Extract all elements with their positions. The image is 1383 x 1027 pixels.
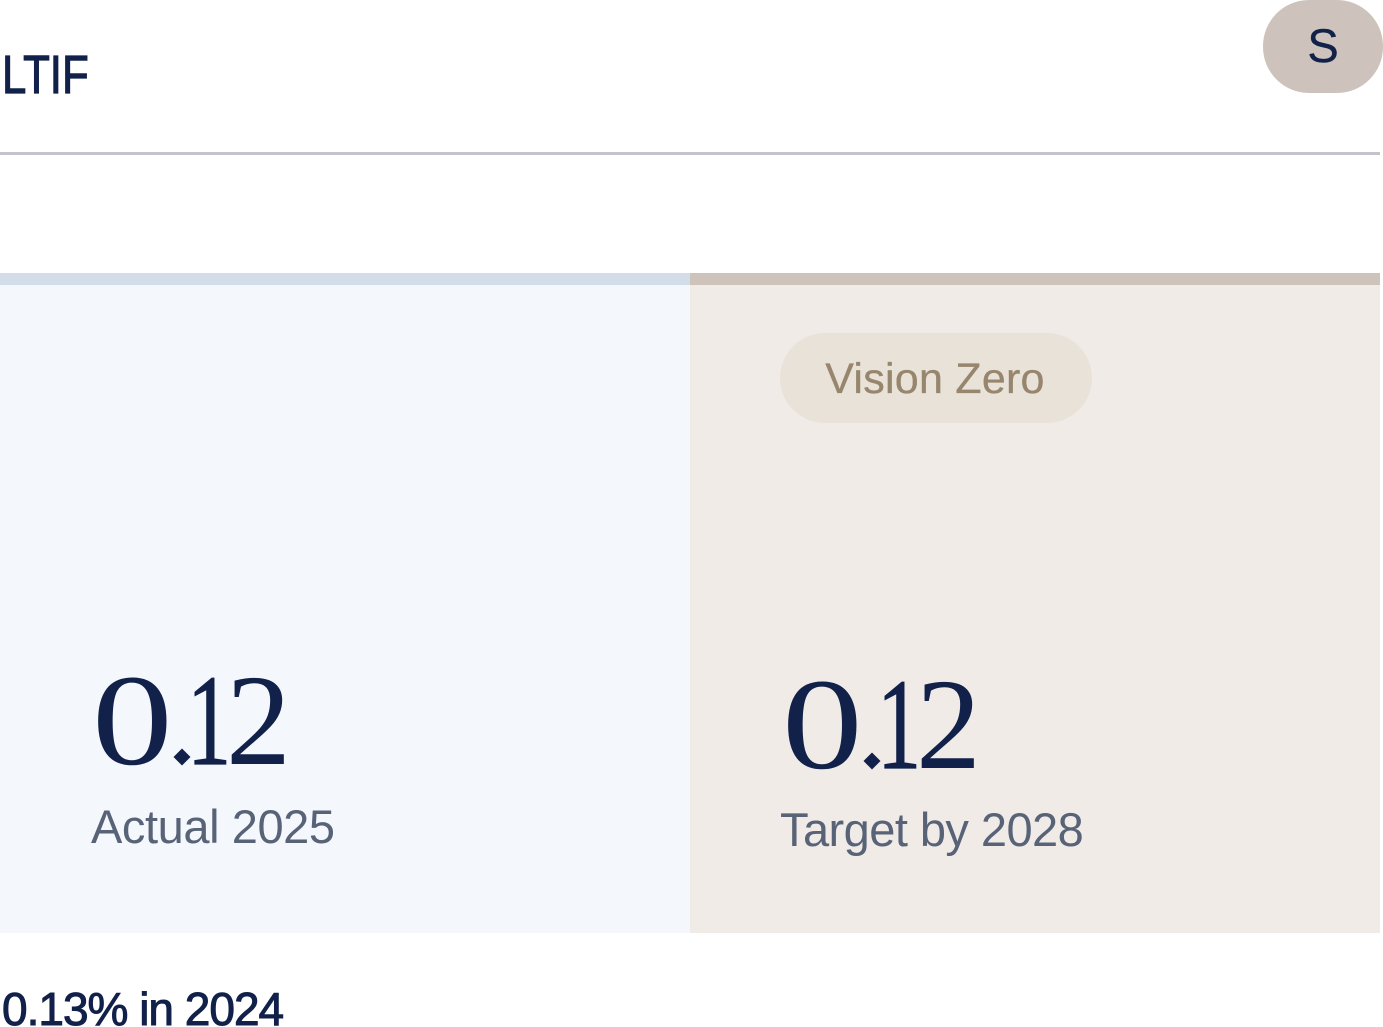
panel accent bar	[0, 273, 690, 285]
target value: 2	[916, 653, 981, 797]
target value: 1	[876, 653, 921, 797]
actual value: 0	[92, 649, 173, 793]
header divider	[0, 152, 1380, 155]
badge: S: S	[1307, 19, 1339, 72]
actual value: 2	[226, 649, 291, 793]
panel: actual	[0, 273, 690, 933]
title: LTIF	[2, 45, 89, 105]
panel: target	[690, 273, 1380, 933]
badge: S	[1263, 0, 1383, 93]
target value: 0	[782, 653, 863, 797]
target value: .	[864, 711, 879, 777]
panel accent bar	[690, 273, 1380, 285]
pill: Vision Zero	[780, 333, 1092, 423]
actual value	[92, 649, 291, 793]
actual value: .	[174, 707, 189, 773]
actual value: 1	[186, 649, 231, 793]
pill: Vision Zero: Vision Zero	[825, 355, 1045, 403]
target value	[782, 653, 981, 797]
target label: Target by 2028	[780, 803, 1083, 856]
actual label: Actual 2025	[91, 800, 335, 853]
